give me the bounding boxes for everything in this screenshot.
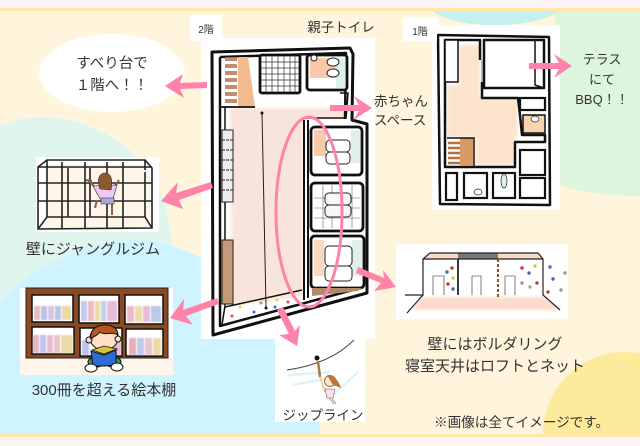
illustration: zipline	[275, 338, 365, 422]
toilet room	[307, 55, 347, 90]
label: 1st floor	[403, 17, 437, 41]
bedrooms	[311, 127, 364, 296]
label: 1st floor: 1階	[412, 26, 428, 38]
caption: bouldering and loft: 寝室天井はロフトとネット	[405, 358, 585, 375]
caption: bouldering and loft	[405, 336, 585, 375]
label: terrace BBQ: BBQ！！	[575, 92, 629, 107]
caption: jungle gym: 壁にジャングルジム	[26, 241, 160, 258]
floor plan: 2nd floor	[201, 38, 375, 339]
net room	[260, 55, 300, 93]
arrow: to terrace	[529, 54, 572, 78]
label: baby space: スペース	[374, 113, 426, 128]
arrow: to climbing wall	[356, 267, 396, 291]
stairs	[221, 57, 255, 304]
caption: bouldering and loft: 壁にはボルダリング	[427, 336, 563, 353]
speech bubble: slide: すべり台で	[76, 55, 148, 72]
arrow: to jungle gym	[161, 182, 213, 209]
arrow: to slide bubble	[165, 74, 207, 98]
arrow: to bookshelf	[170, 298, 219, 325]
label: parent-child toilet: 親子トイレ	[307, 20, 375, 35]
speech bubble: slide: １階へ！！	[76, 77, 148, 94]
label: terrace BBQ: にて	[589, 72, 615, 87]
speech bubble: slide	[39, 34, 185, 112]
arrow: to baby space	[330, 96, 372, 120]
caption: bookshelf: 300冊を超える絵本棚	[32, 382, 176, 399]
label: baby space: 赤ちゃん	[374, 94, 428, 109]
arrow: to zipline	[277, 307, 300, 346]
boy reading	[85, 325, 123, 372]
label: terrace BBQ: テラス	[583, 52, 621, 67]
pink arrows	[161, 54, 572, 346]
caption: zipline: ジップライン	[282, 408, 364, 423]
illustration: bookshelf	[20, 288, 173, 375]
books	[33, 301, 161, 355]
note: ※画像は全てイメージです。	[434, 415, 609, 430]
label: terrace BBQ	[575, 52, 629, 107]
illustration: jungle gym	[36, 157, 159, 232]
illustration: climbing wall and bedroom	[396, 244, 568, 319]
label: baby space	[374, 94, 428, 128]
zipline wire	[262, 113, 266, 307]
label: 2nd floor: 2階	[198, 24, 214, 36]
floor plan: 1st floor	[432, 25, 560, 210]
highlight ellipse	[276, 117, 342, 307]
climbing holds	[230, 298, 290, 318]
label: 2nd floor	[190, 15, 222, 41]
